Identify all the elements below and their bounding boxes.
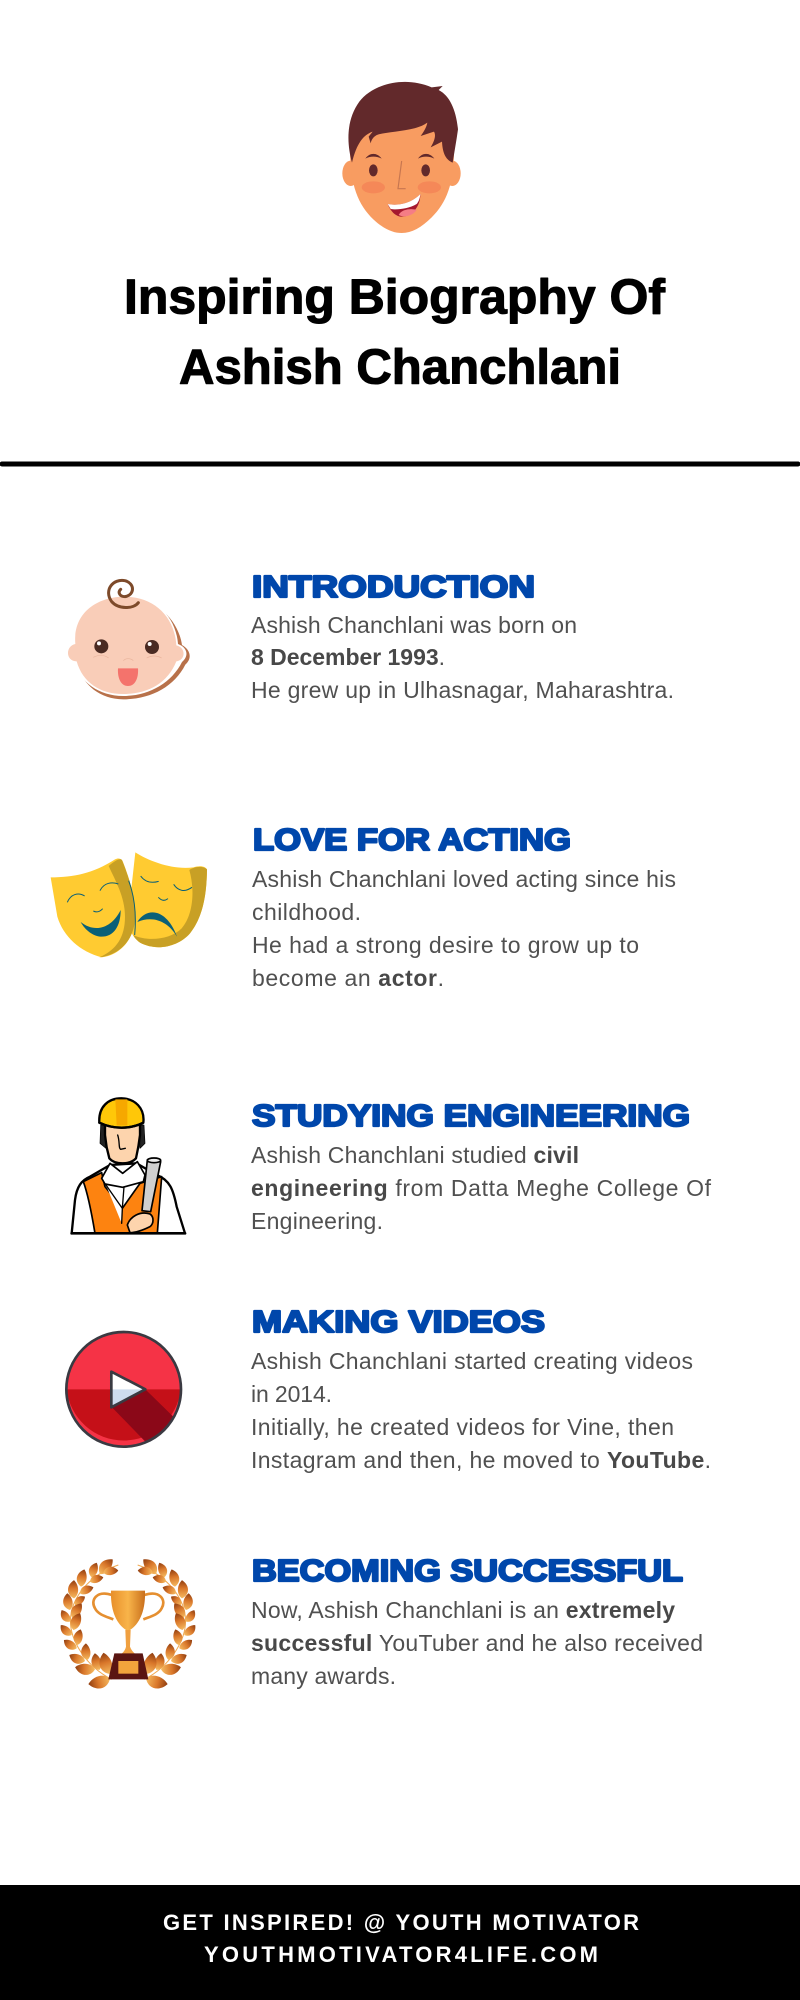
text block: Initially, he created videos for Vine, then bbox=[251, 1414, 674, 1440]
text block: Instagram and then, he moved to YouTube. bbox=[251, 1447, 711, 1473]
text block: childhood. bbox=[252, 899, 361, 925]
footer band: GET INSPIRED! @ YOUTH MOTIVATOR bbox=[163, 1910, 639, 1935]
panel: love for acting bbox=[51, 822, 676, 991]
icon: cheeks bbox=[362, 181, 441, 193]
icon: head bbox=[350, 110, 454, 233]
text block: successful YouTuber and he also received bbox=[251, 1630, 703, 1656]
heading: INTRODUCTION bbox=[252, 569, 535, 604]
text block bbox=[251, 1348, 711, 1473]
footer band: YOUTHMOTIVATOR4LIFE.COM bbox=[204, 1942, 598, 1967]
text block bbox=[252, 866, 676, 991]
title: Ashish Chanchlani bbox=[179, 340, 621, 394]
footer band bbox=[0, 1885, 800, 2000]
icon: collar bbox=[102, 1162, 145, 1187]
icon: orange vest bbox=[83, 1173, 162, 1233]
text block: in 2014. bbox=[251, 1381, 332, 1407]
icon: play triangle bbox=[111, 1372, 145, 1407]
icon: trophy and laurel wreath bbox=[58, 1555, 198, 1691]
text block: Ashish Chanchlani studied civil bbox=[251, 1142, 579, 1168]
text block: 8 December 1993. bbox=[251, 644, 445, 670]
heading: MAKING VIDEOS bbox=[252, 1304, 545, 1339]
panel: studying engineering bbox=[72, 1098, 712, 1234]
text block: many awards. bbox=[251, 1663, 396, 1689]
title bbox=[124, 270, 666, 394]
text block: Ashish Chanchlani started creating videos bbox=[251, 1348, 693, 1374]
icon: play button bbox=[66, 1332, 181, 1447]
icon: boy face bbox=[342, 82, 461, 233]
icon: rolled blueprints bbox=[142, 1160, 161, 1212]
text block: Ashish Chanchlani was born on bbox=[251, 612, 577, 638]
panel: introduction bbox=[67, 569, 674, 703]
icon: nose bbox=[398, 161, 406, 189]
heading: LOVE FOR ACTING bbox=[253, 822, 571, 857]
icon: helmet bbox=[99, 1098, 144, 1128]
text block: He grew up in Ulhasnagar, Maharashtra. bbox=[251, 677, 674, 703]
icon: happy mask bbox=[51, 859, 135, 957]
text block bbox=[251, 1597, 703, 1689]
icon: trophy bbox=[93, 1591, 163, 1679]
icon: laurel wreath bbox=[58, 1555, 198, 1691]
icon: eyes bbox=[94, 639, 159, 654]
icon: eyebrows and eyes bbox=[365, 154, 434, 176]
icon: hair sides bbox=[100, 1125, 145, 1148]
icon: sad mask bbox=[129, 852, 207, 947]
icon: tongue bbox=[118, 668, 138, 686]
heading: BECOMING SUCCESSFUL bbox=[252, 1553, 683, 1588]
text block bbox=[251, 612, 674, 703]
icon: baby face bbox=[67, 580, 190, 699]
icon: smile bbox=[388, 194, 420, 217]
text block bbox=[251, 1142, 712, 1234]
icon: hair bbox=[348, 82, 458, 163]
panel: becoming successful bbox=[58, 1553, 703, 1691]
title: Inspiring Biography Of bbox=[124, 270, 666, 324]
heading: STUDYING ENGINEERING bbox=[252, 1098, 690, 1133]
icon: curl bbox=[109, 580, 138, 608]
panel: making videos bbox=[66, 1304, 711, 1473]
text block: Now, Ashish Chanchlani is an extremely bbox=[251, 1597, 675, 1623]
icon: torso and shirt bbox=[72, 1163, 185, 1233]
text block: Ashish Chanchlani loved acting since his bbox=[252, 866, 676, 892]
text block: Engineering. bbox=[251, 1208, 383, 1234]
icon: theatre masks bbox=[51, 852, 207, 957]
text block: engineering from Datta Meghe College Of bbox=[251, 1175, 712, 1201]
text block: He had a strong desire to grow up to bbox=[252, 932, 639, 958]
text block: become an actor. bbox=[252, 965, 444, 991]
icon: engineer bbox=[72, 1098, 185, 1233]
icon: hand bbox=[127, 1213, 153, 1233]
icon: ears bbox=[342, 161, 461, 186]
icon: neck and face bbox=[105, 1125, 140, 1163]
